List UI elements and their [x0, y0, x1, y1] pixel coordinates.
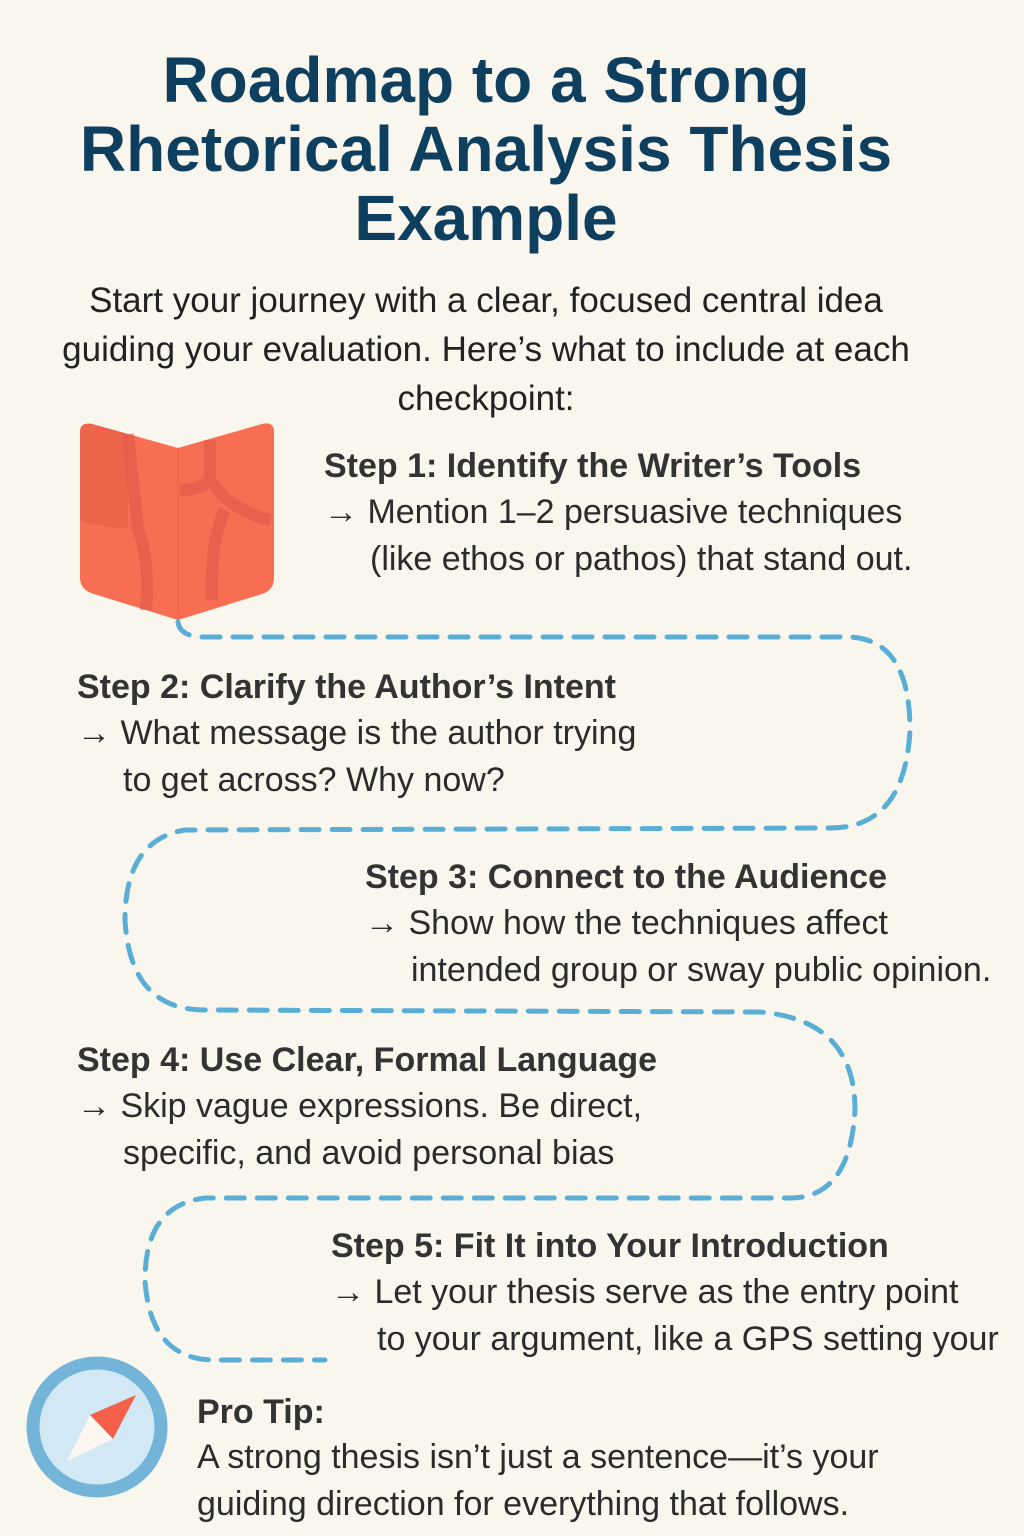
subtitle: checkpoint: — [397, 379, 575, 418]
step 4: specific, and avoid personal bias — [123, 1134, 614, 1172]
step 5: Step 5: Fit It into Your Introduction — [331, 1227, 889, 1265]
title — [80, 44, 892, 254]
subtitle: Start your journey with a clear, focused central idea — [89, 281, 883, 320]
pro tip: Pro Tip: — [197, 1393, 325, 1431]
step 1: → Mention 1–2 persuasive techniques — [324, 493, 902, 531]
pro tip: guiding direction for everything that follows. — [197, 1485, 849, 1523]
step 2: Step 2: Clarify the Author’s Intent — [77, 668, 616, 706]
step 5: to your argument, like a GPS setting your — [377, 1320, 999, 1358]
step 3: Step 3: Connect to the Audience — [365, 858, 887, 896]
subtitle — [62, 281, 910, 418]
step 1 — [324, 447, 912, 578]
icon: map — [80, 423, 274, 620]
step 3 — [365, 858, 991, 989]
title: Example — [354, 182, 618, 254]
step 4 — [77, 1041, 657, 1172]
pro tip: A strong thesis isn’t just a sentence—it’s your — [197, 1438, 879, 1476]
step 2: → What message is the author trying — [77, 714, 636, 752]
step 4: → Skip vague expressions. Be direct, — [77, 1087, 642, 1125]
step 1: Step 1: Identify the Writer’s Tools — [324, 447, 861, 485]
title: Rhetorical Analysis Thesis — [80, 113, 892, 185]
subtitle: guiding your evaluation. Here’s what to include at each — [62, 330, 910, 369]
step 4: Step 4: Use Clear, Formal Language — [77, 1041, 657, 1079]
title: Roadmap to a Strong — [162, 44, 810, 116]
step 3: → Show how the techniques affect — [365, 904, 888, 942]
step 3: intended group or sway public opinion. — [411, 951, 991, 989]
step 5 — [331, 1227, 999, 1358]
step 2: to get across? Why now? — [123, 761, 505, 799]
icon: compass — [26, 1356, 168, 1498]
step 1: (like ethos or pathos) that stand out. — [370, 540, 912, 578]
step 5: → Let your thesis serve as the entry point — [331, 1273, 958, 1311]
step 2 — [77, 668, 636, 799]
pro tip — [197, 1393, 879, 1523]
